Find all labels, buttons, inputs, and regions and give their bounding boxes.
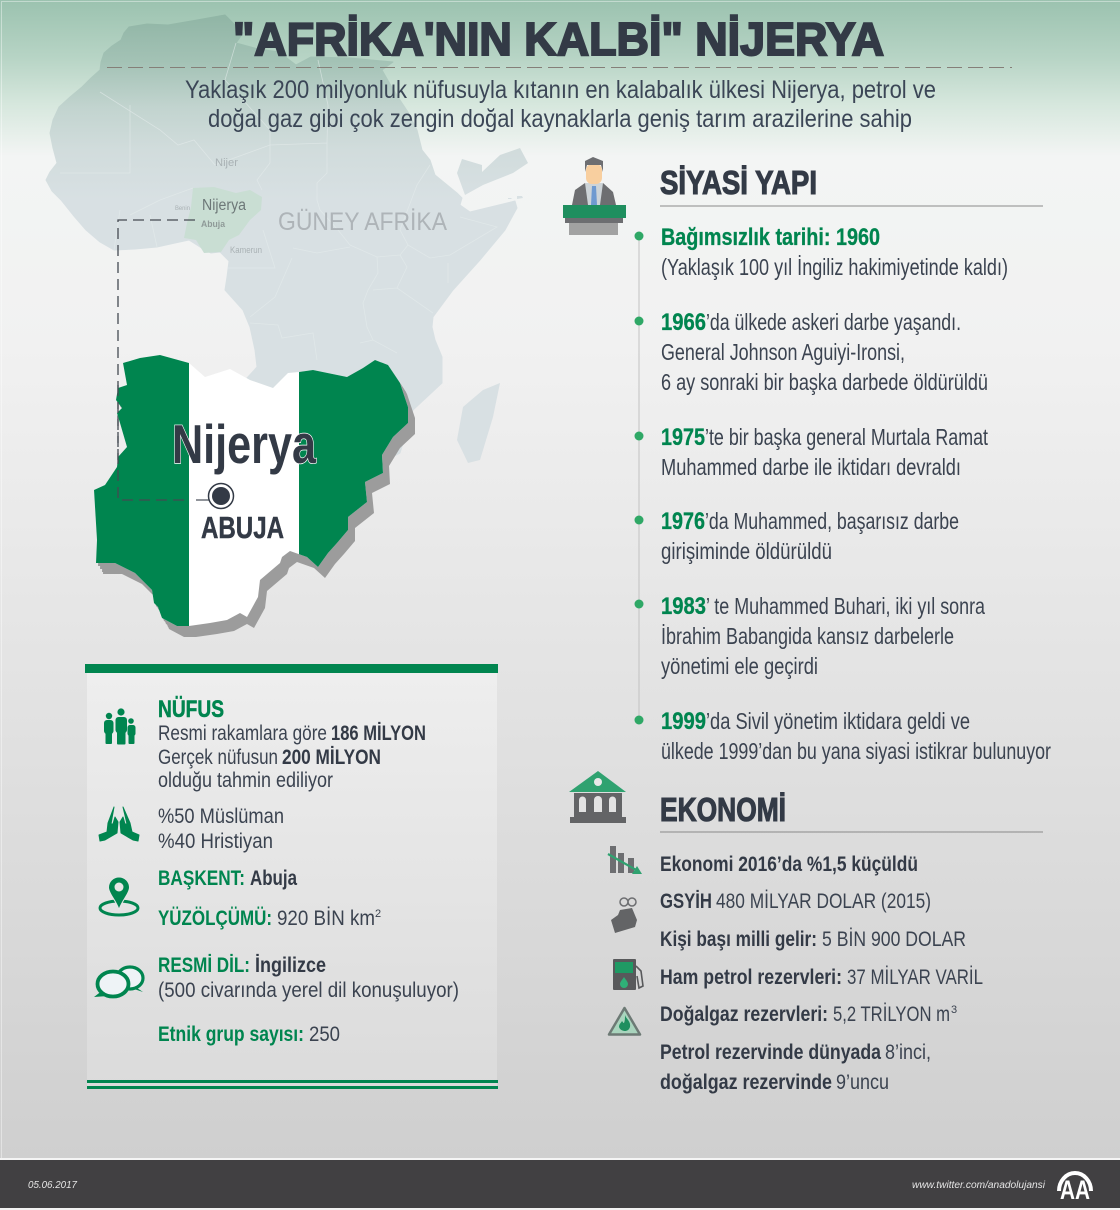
icon: bank building [569, 771, 626, 823]
text: oil reserves [660, 966, 983, 989]
text: population: NÜFUS [158, 696, 224, 723]
subtitle: doğal gaz gibi çok zengin doğal kaynaklarla geniş tarım arazilerine sahip [208, 105, 912, 133]
icon: money bag [611, 898, 637, 933]
icon: falling chart [608, 846, 642, 874]
icon: fuel pump [613, 959, 643, 990]
entry: independence: (Yaklaşık 100 yıl İngiliz hakimiyetinde kaldı) [661, 254, 1008, 280]
text: religion: %50 Müslüman [158, 805, 284, 828]
entry: 1999 [661, 708, 1051, 764]
entry: 1975: 1975 [661, 424, 705, 451]
map labels: Abuja [201, 219, 226, 230]
footer [0, 1160, 1120, 1208]
panel: country facts [85, 664, 498, 1089]
heading: political structure: SİYASİ YAPI [660, 164, 817, 201]
icon: people [104, 708, 136, 744]
text: gas reserves: 3 [951, 1004, 957, 1016]
text: population: olduğu tahmin ediliyor [158, 769, 333, 792]
label: Nijerya: Nijerya [172, 413, 316, 475]
text: world ranking: Petrol rezervinde dünyada [660, 1041, 881, 1064]
map: Nigeria flag shape [85, 340, 419, 640]
text: gas reserves: Doğalgaz rezervleri: [660, 1003, 828, 1026]
entry: 1966: General Johnson Aguiyi-Ironsi, [661, 339, 905, 365]
map labels: Kamerun [230, 245, 262, 256]
entry: 1983 [661, 593, 985, 679]
text: world ranking [660, 1041, 931, 1094]
entry: 1976: ’da Muhammed, başarısız darbe [705, 508, 959, 534]
text: population: 186 MİLYON [331, 722, 426, 745]
text: economy growth: Ekonomi 2016’da %1,5 küçüldü [660, 853, 918, 876]
text: language and ethnic groups: (500 civarında yerel dil konuşuluyor) [158, 979, 459, 1002]
text: oil reserves: 37 MİLYAR VARİL [847, 966, 983, 989]
text: GDP: 480 MİLYAR DOLAR (2015) [716, 890, 931, 913]
label: ABUJA: ABUJA [201, 510, 284, 545]
text: language and ethnic groups: Etnik grup sayısı: [158, 1023, 304, 1046]
marker: Abuja [196, 484, 234, 508]
text: income per capita [660, 928, 966, 951]
text: oil reserves: Ham petrol rezervleri: [660, 966, 842, 989]
text: capital and area: 920 BİN km [277, 907, 375, 930]
text: population: Resmi rakamlara göre [158, 722, 327, 745]
entry: 1983: yönetimi ele geçirdi [661, 653, 818, 679]
icon: speech bubbles [94, 967, 143, 997]
text: gas reserves: 5,2 TRİLYON m [833, 1003, 950, 1026]
text: capital and area [158, 867, 381, 930]
text: world ranking: 8’inci, [885, 1041, 931, 1064]
icon: location pin [100, 877, 138, 915]
text: world ranking: 9’uncu [836, 1071, 889, 1094]
text: GDP: GSYİH [660, 890, 712, 913]
text: income per capita: 5 BİN 900 DOLAR [822, 928, 966, 951]
map labels: Nijer [215, 157, 238, 169]
text: population: Gerçek nüfusun [158, 746, 278, 769]
map: Africa [46, 15, 528, 463]
text: language and ethnic groups: 250 [309, 1023, 340, 1046]
map labels: Benin [175, 206, 190, 212]
entry: 1975: Muhammed darbe ile iktidarı devraldı [661, 454, 961, 480]
text: world ranking: doğalgaz rezervinde [660, 1071, 832, 1094]
entry: 1976: 1976 [661, 508, 705, 535]
subtitle: Yaklaşık 200 milyonluk nüfusuyla kıtanın en kalabalık ülkesi Nijerya, petrol ve [185, 76, 936, 104]
text: population: 200 MİLYON [282, 746, 381, 769]
logo: Anadolu Agency: AA [1060, 1175, 1090, 1205]
footer date: 05.06.2017 [28, 1180, 77, 1191]
text: religion: %40 Hristiyan [158, 830, 273, 853]
dashed connector [118, 220, 195, 500]
icon: gas warning triangle [609, 1008, 640, 1034]
text: gas reserves [660, 1003, 957, 1026]
text: language and ethnic groups: İngilizce [255, 954, 326, 977]
text: GDP [660, 890, 931, 913]
entry: 1966: 1966 [661, 309, 706, 336]
entry: 1983: İbrahim Babangida kansız darbelerle [661, 623, 954, 649]
footer url: www.twitter.com/anadolujansi [912, 1180, 1046, 1191]
entry: 1966: 6 ay sonraki bir başka darbede öldürüldü [661, 369, 988, 395]
entry: 1966 [661, 309, 988, 395]
entry: 1983: 1983 [661, 593, 706, 620]
entry: 1999: ’da Sivil yönetim iktidara geldi ve [706, 708, 970, 734]
entry: 1983: ’ te Muhammed Buhari, iki yıl sonra [706, 593, 985, 619]
entry: 1975: ’te bir başka general Murtala Ramat [705, 424, 988, 450]
icon: speaker at podium [563, 157, 626, 235]
map: Nigeria highlight [184, 187, 262, 253]
entry: independence [661, 224, 1008, 280]
text: religion [158, 805, 284, 853]
text: capital and area: BAŞKENT: [158, 867, 245, 890]
heading: economy: EKONOMİ [660, 791, 786, 828]
text: language and ethnic groups [158, 954, 459, 1046]
entry: 1976: girişiminde öldürüldü [661, 538, 832, 564]
text: capital and area: 2 [375, 908, 381, 920]
map labels: GÜNEY AFRİKA [278, 207, 447, 236]
text: capital and area: Abuja [250, 867, 297, 890]
text: language and ethnic groups: RESMİ DİL: [158, 954, 250, 977]
entry: 1999: 1999 [661, 708, 706, 735]
subtitle [185, 76, 936, 133]
entry: 1976 [661, 508, 959, 564]
entry: 1975 [661, 424, 988, 480]
text: income per capita: Kişi başı milli gelir: [660, 928, 817, 951]
text: capital and area: YÜZÖLÇÜMÜ: [158, 907, 272, 930]
icon: praying hands [99, 807, 139, 841]
map labels [175, 157, 447, 256]
entry: independence: Bağımsızlık tarihi: 1960 [661, 224, 880, 251]
map labels: Nijerya [202, 197, 246, 214]
text: population [158, 696, 426, 792]
entry: 1966: ’da ülkede askeri darbe yaşandı. [706, 309, 961, 335]
title: "AFRİKA'NIN KALBİ" NİJERYA [233, 13, 884, 65]
timeline: political history [634, 224, 1051, 764]
